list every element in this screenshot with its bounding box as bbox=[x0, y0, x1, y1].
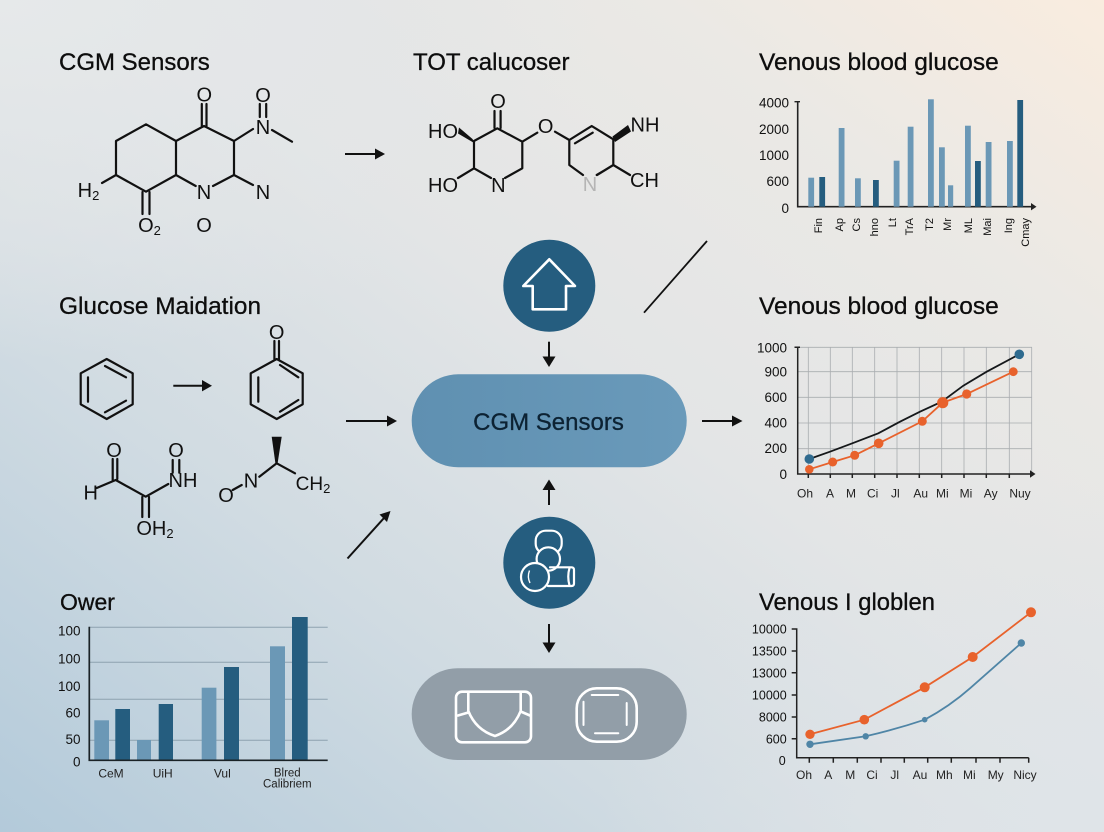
arrow: pill to line chart bbox=[702, 416, 742, 426]
molecule: nitroso fragment bbox=[218, 437, 330, 507]
molecule: linked ring structure bbox=[428, 91, 659, 197]
line chart with grid bbox=[757, 340, 1036, 500]
molecule: nitroso fragment: O bbox=[218, 485, 234, 507]
molecule: fused ring structure: O bbox=[255, 85, 271, 107]
grouped bar chart: Blred bbox=[274, 768, 301, 780]
bar chart: Cmay bbox=[1020, 218, 1032, 247]
line chart with grid: 1000 bbox=[757, 340, 787, 356]
molecule: linked ring structure: O bbox=[538, 116, 553, 138]
line chart with grid: Mi bbox=[936, 486, 949, 500]
molecule: nitroso fragment: 2 bbox=[323, 481, 330, 496]
molecule: amide fragment: 2 bbox=[166, 526, 174, 541]
molecule: linked ring structure: CH bbox=[630, 170, 659, 192]
heading: Venous globlen: Venous I globlen bbox=[759, 589, 935, 616]
molecule: linked ring structure: N bbox=[491, 175, 506, 197]
line chart with grid: Mi bbox=[960, 486, 972, 500]
grouped bar chart: Vul bbox=[214, 767, 231, 781]
molecule: linked ring structure: HO bbox=[428, 121, 458, 143]
line chart: Au bbox=[913, 768, 927, 782]
icon: sensor patch bbox=[456, 692, 531, 742]
line chart: 8000 bbox=[759, 710, 787, 724]
line chart bbox=[752, 607, 1037, 782]
bar chart: Lt bbox=[887, 218, 899, 227]
arrow: molecule circle to device pill bbox=[542, 624, 556, 653]
bar chart: 0 bbox=[781, 201, 789, 216]
heading: CGM Sensors: CGM Sensors bbox=[59, 49, 210, 76]
grouped bar chart: 60 bbox=[65, 705, 80, 720]
heading: Ower: Ower bbox=[60, 589, 115, 615]
panel: Glucose Maidation molecules bbox=[59, 293, 330, 541]
line chart: 10000 bbox=[752, 622, 787, 636]
bar chart bbox=[759, 96, 1036, 247]
line chart with grid: Au bbox=[913, 486, 928, 500]
bar chart: ML bbox=[963, 218, 975, 233]
icon: sensor ring bbox=[577, 688, 637, 742]
grouped bar chart bbox=[58, 617, 328, 790]
bar chart: Cs bbox=[851, 218, 863, 231]
panel: Venous blood glucose bar chart bbox=[759, 49, 1036, 247]
molecule: nitroso fragment: CH bbox=[296, 474, 323, 495]
line chart: M bbox=[845, 768, 855, 782]
series: orange line bbox=[805, 607, 1036, 739]
heading: TOT calucoser: TOT calucoser bbox=[413, 49, 570, 76]
grouped bar chart: 100 bbox=[58, 624, 80, 639]
molecule: fused ring structure: 2 bbox=[92, 188, 99, 203]
central pill: CGM Sensors bbox=[412, 374, 687, 467]
molecule: linked ring structure: O bbox=[490, 91, 506, 113]
grouped bar chart: 0 bbox=[73, 755, 80, 770]
molecule: fused ring structure: O bbox=[138, 215, 154, 237]
line chart: Mi bbox=[963, 768, 976, 782]
line chart: 0 bbox=[779, 754, 786, 768]
device pill bbox=[412, 668, 687, 760]
bar chart: 4000 bbox=[759, 96, 789, 110]
bar chart: Mai bbox=[982, 218, 994, 236]
line chart with grid: 900 bbox=[764, 364, 787, 380]
icon: house circle bbox=[503, 240, 595, 332]
molecule: amide fragment: H bbox=[83, 482, 98, 504]
bar chart: 2000 bbox=[759, 122, 789, 137]
connector: diagonal line bbox=[644, 241, 707, 313]
molecule: ketone ring: O bbox=[269, 322, 284, 344]
arrow: molecule circle to pill bbox=[542, 480, 556, 505]
molecule: amide fragment: OH bbox=[136, 518, 166, 540]
molecule: linked ring structure: N bbox=[583, 174, 597, 196]
grouped bar chart: CeM bbox=[98, 767, 124, 781]
line chart with grid: 0 bbox=[779, 467, 787, 482]
line chart with grid: 600 bbox=[764, 390, 787, 405]
molecule: fused ring structure: O bbox=[197, 84, 212, 106]
line chart with grid: M bbox=[846, 486, 856, 500]
arrow: benzene to ketone bbox=[173, 380, 212, 391]
arrow: house to pill bbox=[542, 342, 556, 367]
arrow: CGM molecule to TOT molecule bbox=[345, 148, 385, 160]
line chart: My bbox=[988, 768, 1004, 782]
molecule: fused ring structure: 2 bbox=[154, 223, 161, 238]
line chart: Ci bbox=[866, 768, 878, 782]
line chart: A bbox=[824, 768, 832, 782]
panel: TOT calucoser molecule bbox=[413, 49, 659, 197]
heading: Venous blood glucose: Venous blood glucose bbox=[759, 293, 999, 320]
grouped bar chart: 100 bbox=[58, 679, 80, 694]
bar chart: TrA bbox=[904, 217, 916, 235]
arrow: diagonal to central pill bbox=[348, 511, 390, 558]
line chart: Jl bbox=[890, 768, 899, 782]
molecule: amide fragment: O bbox=[168, 440, 184, 462]
central pill: CGM Sensors: CGM Sensors bbox=[473, 409, 624, 436]
line chart with grid: Oh bbox=[797, 486, 813, 500]
bar chart: Ap bbox=[834, 218, 846, 231]
line chart with grid: Ay bbox=[984, 486, 998, 500]
bar chart: Fin bbox=[813, 218, 825, 233]
line chart: Mh bbox=[936, 768, 953, 782]
line chart: Oh bbox=[796, 768, 812, 782]
line chart with grid: 400 bbox=[764, 416, 787, 430]
series: black line bbox=[804, 350, 1024, 464]
molecule: fused ring structure: N bbox=[256, 117, 270, 139]
line chart: 13000 bbox=[752, 666, 787, 680]
panel: Venous globlen line chart bbox=[752, 589, 1037, 782]
molecule: amide fragment: O bbox=[106, 440, 122, 462]
grouped bar chart: 100 bbox=[58, 651, 80, 666]
line chart: 13500 bbox=[752, 644, 787, 658]
icon: molecule circle bbox=[503, 517, 595, 609]
line chart with grid: Ci bbox=[867, 486, 878, 500]
molecule: linked ring structure: NH bbox=[631, 115, 659, 137]
molecule: benzene ring bbox=[81, 359, 133, 419]
molecule: linked ring structure: HO bbox=[428, 175, 458, 197]
grouped bar chart: 50 bbox=[65, 732, 80, 747]
arrow: molecules to central pill bbox=[346, 416, 397, 426]
wedge bonds bbox=[458, 125, 631, 144]
series: orange line bbox=[805, 367, 1018, 474]
molecule: fused ring structure bbox=[78, 84, 292, 238]
line chart with grid: 200 bbox=[764, 441, 787, 456]
panel: Ower bar chart bbox=[58, 589, 328, 790]
bar chart: hno bbox=[869, 218, 881, 236]
molecule: fused ring structure: N bbox=[197, 182, 211, 204]
heading: Venous blood glucose: Venous blood glucose bbox=[759, 49, 999, 76]
line chart: 10000 bbox=[752, 688, 787, 702]
molecule: fused ring structure: N bbox=[256, 182, 270, 204]
panel: CGM Sensors molecule bbox=[59, 49, 292, 238]
bar chart: 600 bbox=[766, 174, 789, 189]
line chart: 600 bbox=[766, 732, 787, 746]
bar chart: Mr bbox=[942, 218, 954, 231]
grouped bar chart: UiH bbox=[153, 767, 173, 781]
bar chart: 1000 bbox=[759, 148, 789, 163]
molecule: nitroso fragment: N bbox=[244, 470, 258, 492]
molecule: amide fragment bbox=[83, 440, 197, 541]
heading: Glucose Maidation: Glucose Maidation bbox=[59, 293, 261, 320]
molecule: ketone ring bbox=[251, 322, 303, 419]
panel: Venous blood glucose line chart bbox=[757, 293, 1036, 500]
series: blue line bbox=[806, 639, 1025, 748]
line chart with grid: A bbox=[826, 486, 834, 500]
molecule: amide fragment: NH bbox=[169, 470, 197, 492]
molecule: fused ring structure: O bbox=[196, 215, 212, 237]
molecule: fused ring structure: H bbox=[78, 180, 92, 202]
bar chart: T2 bbox=[924, 218, 936, 231]
line chart with grid: Jl bbox=[891, 486, 900, 500]
line chart with grid: Nuy bbox=[1009, 486, 1031, 500]
grouped bar chart: Calibriem bbox=[263, 778, 312, 790]
line chart: Nicy bbox=[1013, 768, 1037, 782]
bar chart: Ing bbox=[1003, 218, 1015, 233]
